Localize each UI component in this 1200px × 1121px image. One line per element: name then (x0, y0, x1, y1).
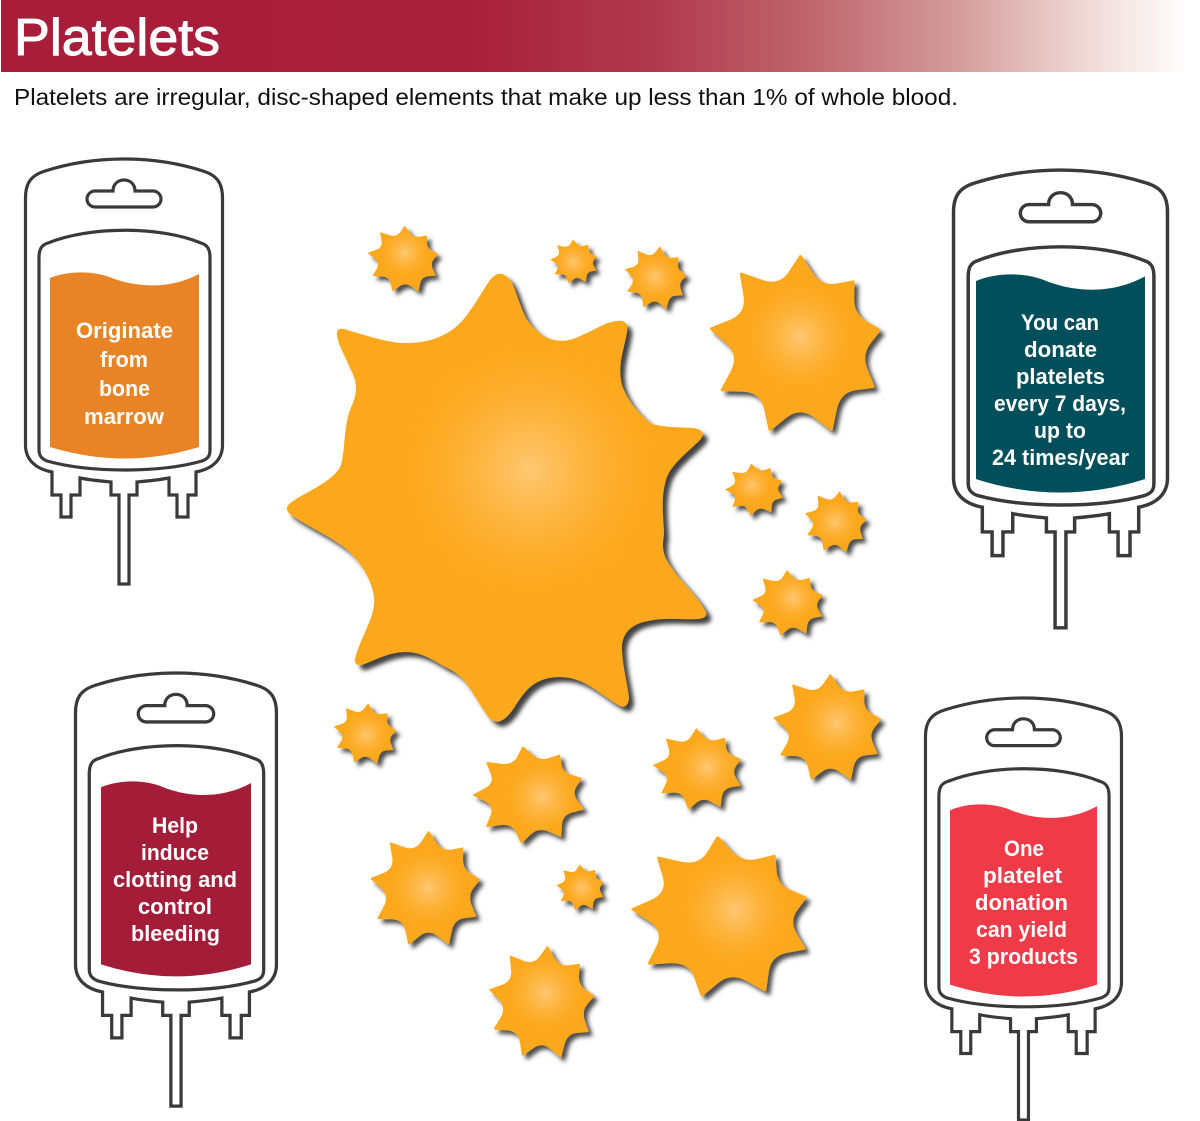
platelet 7 (753, 571, 822, 635)
platelet 10 (633, 838, 805, 995)
bag text: clotting (113, 813, 237, 946)
platelet 15 (482, 940, 599, 1063)
fluid: orange (50, 272, 199, 458)
platelet 12 (470, 743, 586, 846)
title: Platelets (14, 9, 220, 67)
platelet 1 (366, 224, 439, 294)
platelet 11 (330, 700, 399, 767)
platelet 3 (620, 242, 690, 313)
bag: originate from bone marrow (26, 159, 222, 584)
bag: help induce clotting (76, 673, 276, 1106)
bag text: donate: donate (1024, 337, 1097, 362)
bag text: products: can yield (976, 917, 1067, 942)
platelet 14 (557, 865, 603, 910)
bag text: clotting: induce (141, 840, 209, 865)
bag text: donate: up to (1034, 418, 1086, 443)
platelet 6 (800, 487, 870, 556)
bag text: donate (992, 310, 1129, 470)
fluid: teal (976, 274, 1145, 493)
platelet 9 (654, 729, 741, 809)
bag text: products: One (1004, 836, 1044, 861)
platelet 13 (366, 828, 483, 949)
bag text: clotting: clotting and (113, 867, 237, 892)
bag text: products: donation (975, 890, 1068, 915)
platelet 2 (551, 240, 596, 283)
subtitle text: Platelets are irregular, disc-shaped elements that make up less than 1% of whole blood. (14, 84, 958, 110)
bag text: donate: platelets (1016, 364, 1105, 389)
bag text: products: 3 products (969, 944, 1078, 969)
bag text: clotting: control (138, 894, 212, 919)
bag text: donate: You can (1021, 310, 1099, 335)
bag text: originate (76, 318, 173, 429)
bag text: originate: Originate (76, 318, 173, 343)
header banner (1, 0, 1200, 72)
bag text: originate: marrow (84, 404, 165, 429)
platelet 8 (770, 671, 883, 784)
bag text: clotting: Help (152, 813, 198, 838)
bag text: donate: 24 times/year (992, 445, 1129, 470)
platelet 4 (703, 249, 885, 438)
bag: donate every 7 days (954, 170, 1167, 628)
bag text: products: platelet (983, 863, 1063, 888)
bag text: donate: every 7 days, (994, 391, 1126, 416)
large platelet (287, 274, 706, 722)
bag text: originate: from (100, 347, 148, 372)
fluid: red (950, 804, 1097, 996)
fluid: crimson (101, 781, 251, 976)
bag text: clotting: bleeding (131, 921, 220, 946)
bag: one donation three products (925, 698, 1121, 1120)
bag text: products (969, 836, 1078, 969)
platelet 5 (724, 462, 784, 517)
bag text: originate: bone (99, 376, 150, 401)
